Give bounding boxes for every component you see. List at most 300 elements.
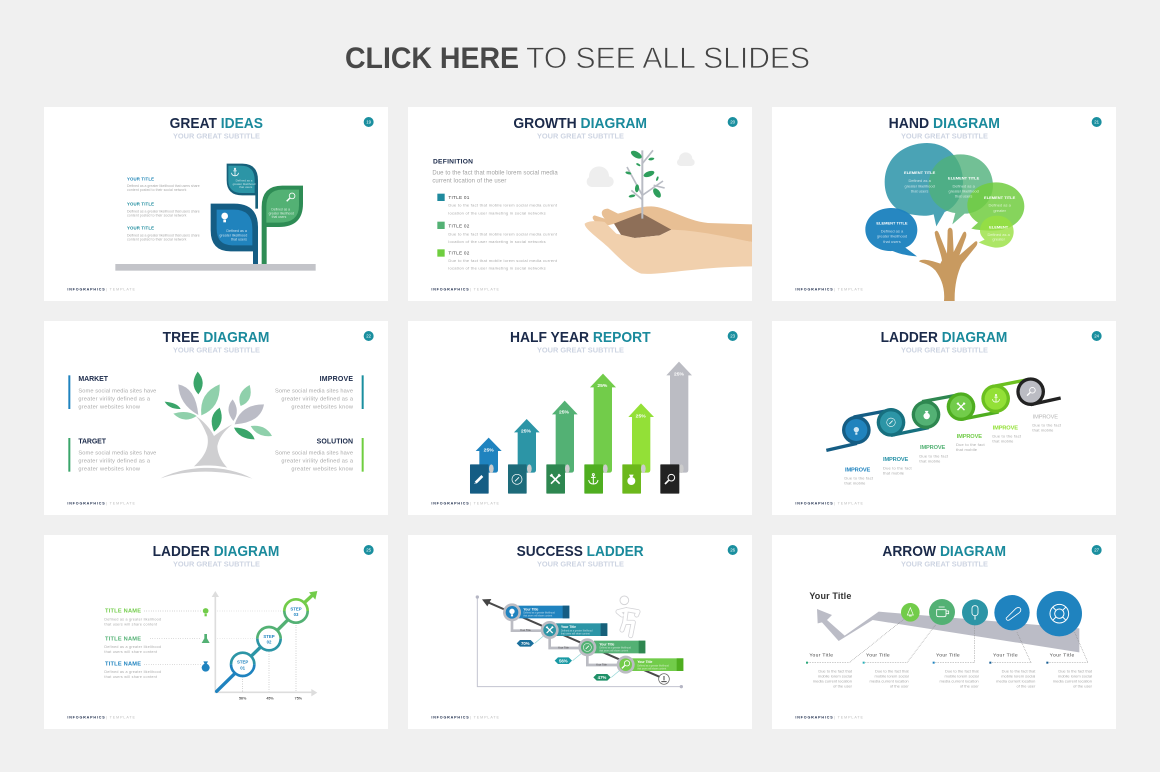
block: solution: greater virility defined as a: [281, 459, 354, 465]
heading: click here to see all slides: [345, 42, 810, 75]
growth line: [217, 591, 317, 691]
hand: [919, 228, 977, 301]
column 5: mobile lorem social: [1058, 673, 1092, 678]
footer: | TEMPLATE: [834, 715, 864, 719]
step 1: [842, 416, 871, 444]
subtitle: YOUR GREAT SUBTITLE: [901, 345, 988, 354]
labels: that mobile: [883, 470, 905, 475]
column 5: of the user: [1073, 684, 1093, 689]
bar 1: [518, 606, 569, 618]
title: HAND DIAGRAM: [889, 116, 1000, 132]
bubble labels: that users: [955, 193, 972, 198]
bar 2: [556, 623, 607, 636]
bubble labels: greater likelihood: [904, 183, 935, 188]
column 3: media current location: [939, 678, 979, 683]
footer: [431, 501, 500, 505]
panel: tree diagram: [44, 321, 388, 515]
speech bubble: blue: [865, 208, 917, 256]
cloud left: [587, 166, 614, 187]
step 4: [947, 392, 975, 421]
page badge: [364, 545, 374, 555]
panel: half year report: [408, 321, 752, 515]
axis labels: 45%: [266, 697, 274, 701]
step 6: [1016, 377, 1045, 406]
arrow 6: 25%: [674, 371, 685, 377]
arrow 2: 25%: [521, 428, 532, 434]
block: market: greater virility defined as a: [78, 396, 151, 402]
footer: INFOGRAPHICS: [431, 287, 469, 291]
axis labels: [239, 697, 303, 701]
dotted guides: [144, 611, 296, 692]
speech bubble: light green: [967, 182, 1024, 231]
tree illustration: [161, 372, 272, 479]
column 2: mobile lorem social: [875, 673, 909, 678]
bar 3: that users will share content: [599, 650, 629, 653]
footer: INFOGRAPHICS: [67, 287, 105, 291]
list item 2: [437, 222, 558, 244]
block: market: MARKET: [78, 376, 109, 383]
block: improve: greater websites know: [291, 404, 354, 410]
text block: three titles: [127, 176, 200, 241]
subtitle: YOUR GREAT SUBTITLE: [173, 345, 260, 354]
labels: IMPROVE: [993, 426, 1018, 432]
step 01 circle: STEP: [237, 660, 248, 665]
panel: hand diagram: [772, 107, 1116, 301]
icon: money bag: [202, 661, 210, 672]
footer: [67, 287, 136, 291]
bar 1: Defined as a greater likelihood: [523, 612, 555, 615]
footer: [795, 501, 864, 505]
panel: success ladder: [408, 535, 752, 729]
block: solution: greater websites know: [291, 467, 354, 473]
dotted leader lines: [808, 619, 1088, 663]
bubble labels: Defined as a: [988, 203, 1012, 208]
back hand: [593, 206, 752, 242]
list item 2: location of the user marketing in social networks: [448, 239, 546, 244]
panel: great ideas: [44, 107, 388, 301]
block: improve: greater virility defined as a: [281, 396, 354, 402]
column 1: Your Title: [809, 653, 833, 659]
bar 4: Defined as a greater likelihood: [637, 664, 669, 667]
column 3: Due to the fact that: [945, 668, 980, 673]
block: target: greater websites know: [78, 467, 141, 473]
bent arrow: [817, 609, 1079, 652]
node 3: [578, 638, 596, 656]
definition text: current location of the user: [432, 178, 506, 184]
labels: IMPROVE: [957, 434, 982, 440]
labels: that mobile: [956, 447, 978, 452]
title block 1: that users will share content: [104, 622, 157, 626]
bar 4: that users will share content: [637, 667, 667, 670]
title block 1: Defined as a greater likelihood: [104, 617, 161, 621]
block: solution: SOLUTION: [317, 438, 353, 445]
panel: ladder diagram steps: [44, 535, 388, 729]
heading: click here to see all slides: TO SEE ALL SLIDES: [526, 42, 810, 75]
bubble labels: Defined as a: [987, 232, 1011, 237]
bar 4: Your Title: [637, 660, 653, 664]
list item 3: Due to the fact that mobile lorem social media current: [448, 258, 558, 263]
title: ARROW DIAGRAM: [882, 544, 1006, 560]
subtitle: YOUR GREAT SUBTITLE: [901, 131, 988, 140]
column 2: [866, 653, 910, 689]
circle: cup: [929, 599, 955, 625]
column 4: [993, 653, 1036, 689]
title block 3: that users will share content: [104, 675, 157, 679]
column 1: media current location: [813, 678, 852, 683]
column 1: Due to the fact that: [818, 668, 853, 673]
bubble labels: that users: [883, 239, 901, 244]
icon: bulb: [203, 608, 208, 616]
page badge: 22: [366, 334, 372, 339]
page badge: [1092, 331, 1102, 341]
text block: three titles: YOUR TITLE: [127, 226, 154, 231]
footer: [431, 287, 500, 291]
plant: green right leaf: Defined as a: [271, 207, 290, 211]
column 2: Your Title: [866, 653, 890, 659]
labels: Due to the fact: [919, 453, 949, 458]
arrow 5: [622, 403, 654, 494]
connector captions: [520, 628, 607, 666]
subtitle: YOUR GREAT SUBTITLE: [537, 131, 624, 140]
panel: ladder diagram belt: [772, 321, 1116, 515]
axis labels: 56%: [239, 697, 247, 701]
page badge: [1092, 117, 1102, 127]
bubble labels: greater: [992, 236, 1006, 241]
column 4: Your Title: [993, 653, 1018, 659]
footer: | TEMPLATE: [470, 287, 500, 291]
footer: INFOGRAPHICS: [431, 715, 469, 719]
labels: Due to the fact: [844, 476, 874, 481]
icon: runner: [618, 596, 638, 636]
labels: that mobile: [919, 458, 941, 463]
bar 3: Your Title: [599, 642, 615, 646]
page badge: [728, 331, 738, 341]
page badge: [364, 331, 374, 341]
title block 3: Defined as a greater likelihood: [104, 670, 161, 674]
footer: INFOGRAPHICS: [795, 287, 833, 291]
footer: INFOGRAPHICS: [795, 501, 833, 505]
arrow 5: 25%: [636, 413, 646, 419]
connectors: [512, 621, 619, 665]
column 3: Your Title: [936, 653, 960, 659]
belt segments: [826, 379, 1061, 450]
plant: blue big leaf: [211, 204, 258, 264]
list item 2: TITLE 02: [448, 223, 470, 228]
axes: [476, 595, 683, 688]
bar 1: Your Title: [523, 607, 539, 611]
labels: Due to the fact: [992, 434, 1022, 439]
labels: IMPROVE: [920, 445, 946, 451]
text block: three titles: YOUR TITLE: [127, 202, 154, 207]
heading: your title: Your Title: [809, 591, 851, 601]
page badge: [1092, 545, 1102, 555]
bubble labels: Defined as a: [881, 229, 904, 234]
labels: that mobile: [844, 481, 866, 486]
title: SUCCESS LADDER: [517, 544, 644, 560]
hexagon 56%: 56%: [559, 658, 568, 663]
plant: teal top leaf: [227, 164, 258, 209]
column 5: media current location: [1053, 678, 1092, 683]
soil: [614, 213, 671, 238]
bubble labels: ELEMENT TITLE: [984, 195, 1016, 200]
subtitle: YOUR GREAT SUBTITLE: [173, 559, 260, 568]
step 3: [912, 400, 940, 429]
column 4: media current location: [996, 678, 1035, 683]
text block: three titles: Defined as a greater likelihood that users share: [127, 233, 200, 237]
axes: [212, 591, 317, 696]
arrow 3: 25%: [559, 409, 570, 415]
bar 1: that users will share content: [523, 615, 553, 618]
panel: arrow diagram: [772, 535, 1116, 729]
step 02 circle: 02: [267, 640, 272, 645]
block: solution: Some social media sites have: [275, 451, 353, 457]
text block: three titles: content posted to their social network: [127, 213, 187, 217]
page badge: 25: [366, 548, 372, 553]
list item 2: Due to the fact that mobile lorem social media current: [448, 231, 558, 236]
block: target: greater virility defined as a: [78, 459, 151, 465]
arrow 4: [584, 374, 616, 494]
plant: teal top leaf: that users: [239, 185, 253, 189]
speech bubble: green: [929, 154, 993, 224]
step 02 circle: [257, 627, 281, 650]
column 3: mobile lorem social: [945, 673, 979, 678]
leader dots: [806, 662, 1048, 664]
ground bar: [115, 264, 316, 271]
block: improve: IMPROVE: [320, 376, 353, 383]
icon: flask: [202, 634, 210, 643]
labels: [844, 415, 1062, 486]
arrow 1: 25%: [484, 448, 494, 454]
front hand: [585, 221, 752, 274]
title: LADDER DIAGRAM: [881, 330, 1007, 346]
footer: | TEMPLATE: [470, 501, 500, 505]
column 4: Due to the fact that: [1002, 668, 1036, 673]
hexagon 56%: [555, 657, 572, 664]
footer: | TEMPLATE: [470, 715, 500, 719]
heading: click here to see all slides: CLICK HERE: [345, 42, 519, 75]
text block: three titles: YOUR TITLE: [127, 176, 154, 181]
bar 3: [594, 641, 645, 653]
column 4: mobile lorem social: [1001, 673, 1035, 678]
block: solution: [275, 438, 364, 473]
column 1: mobile lorem social: [818, 673, 852, 678]
circle: lifebuoy: [1037, 591, 1082, 636]
title block 2: TITLE NAME: [105, 636, 141, 642]
plant: blue big leaf: greater likelihood: [219, 233, 247, 237]
bubble labels: that users: [911, 188, 928, 193]
step 01 circle: [231, 653, 254, 676]
hexagon 70%: 70%: [521, 641, 530, 646]
page badge: 19: [366, 120, 372, 125]
step 03 circle: STEP: [290, 606, 302, 611]
definition text: Due to the fact that mobile lorem social media: [432, 170, 558, 176]
list item 1: [437, 194, 558, 215]
subtitle: YOUR GREAT SUBTITLE: [537, 345, 624, 354]
step 02 circle: STEP: [263, 634, 275, 639]
page badge: [728, 117, 738, 127]
footer: INFOGRAPHICS: [431, 501, 469, 505]
labels: that mobile: [1032, 428, 1054, 433]
arrow 3: [546, 401, 578, 494]
bar 4: [632, 658, 683, 671]
list item 3: [437, 249, 558, 271]
footer: | TEMPLATE: [834, 287, 864, 291]
cloud right: [677, 152, 695, 166]
footer: INFOGRAPHICS: [67, 501, 105, 505]
title block 2: that users will share content: [104, 650, 157, 654]
title: GROWTH DIAGRAM: [513, 116, 647, 132]
page badge: 23: [730, 334, 736, 339]
column 2: media current location: [869, 678, 909, 683]
column 2: of the user: [890, 684, 909, 689]
sapling: [625, 149, 665, 219]
plant: green right leaf: that users: [272, 215, 287, 219]
percent links: [535, 635, 621, 677]
text block: three titles: content posted to their social network: [127, 188, 187, 192]
step 01 circle: 01: [240, 665, 246, 670]
bar 2: Defined as a greater likelihood: [561, 629, 593, 632]
text block: three titles: Defined as a greater likelihood that users share: [127, 184, 200, 188]
block: market: Some social media sites have: [78, 388, 156, 394]
column 4: of the user: [1017, 684, 1036, 689]
arrow 1: [470, 438, 502, 494]
title block 2: Defined as a greater likelihood: [104, 645, 161, 649]
bubble labels: greater likelihood: [877, 234, 907, 239]
plant: teal top leaf: greater likelihood: [233, 182, 256, 186]
column 2: Due to the fact that: [875, 668, 910, 673]
arrow 4: 25%: [597, 383, 608, 389]
labels: that mobile: [992, 439, 1014, 444]
title: TREE DIAGRAM: [163, 330, 269, 346]
panel: growth diagram: [408, 107, 752, 301]
footer: | TEMPLATE: [106, 287, 136, 291]
column 5: Your Title: [1050, 653, 1075, 659]
node 4: [617, 656, 635, 674]
bar 3: Defined as a greater likelihood: [599, 647, 631, 650]
column 1: [809, 653, 853, 689]
title block 1: [104, 609, 161, 626]
connector captions: Your Title: [520, 628, 531, 632]
column 3: [936, 653, 980, 689]
title block 3: TITLE NAME: [105, 661, 141, 667]
text block: three titles: Defined as a greater likelihood that users share: [127, 209, 200, 213]
bar 2: that users will share content: [561, 632, 590, 635]
node 2: [541, 621, 559, 639]
dark arrow line: [482, 599, 669, 684]
subtitle: YOUR GREAT SUBTITLE: [537, 559, 624, 568]
footer: [795, 715, 864, 719]
subtitle: YOUR GREAT SUBTITLE: [173, 131, 260, 140]
title block 1: TITLE NAME: [105, 609, 141, 615]
labels: IMPROVE: [1033, 415, 1058, 421]
connector captions: Your Title: [596, 662, 607, 666]
list item 3: location of the user marketing in social networks: [448, 266, 546, 271]
title: HALF YEAR REPORT: [510, 330, 651, 346]
list item 1: TITLE 01: [448, 195, 470, 200]
block: target: Some social media sites have: [78, 451, 156, 457]
bubble labels: ELEMENT TITLE: [876, 221, 908, 226]
bubble labels: greater: [993, 208, 1007, 213]
title: GREAT IDEAS: [170, 116, 263, 132]
list item 3: TITLE 02: [448, 251, 470, 256]
footer: INFOGRAPHICS: [795, 715, 833, 719]
step 03 circle: 03: [294, 612, 299, 617]
bubble labels: Defined as a: [952, 183, 976, 188]
page badge: [364, 117, 374, 127]
list item 1: location of the user marketing in social networks: [448, 210, 546, 215]
title: LADDER DIAGRAM: [153, 544, 279, 560]
bubble labels: [876, 170, 1016, 244]
text block: three titles: content posted to their social network: [127, 237, 187, 241]
title block 3: [104, 661, 161, 679]
labels: IMPROVE: [845, 467, 871, 473]
footer: [67, 501, 136, 505]
column 1: of the user: [833, 684, 853, 689]
labels: Due to the fact: [956, 442, 986, 447]
page badge: 26: [730, 548, 736, 553]
footer: | TEMPLATE: [834, 501, 864, 505]
arrow 6: [660, 362, 692, 494]
bubble labels: ELEMENT TITLE: [948, 175, 980, 180]
hexagon 47%: 47%: [598, 675, 606, 680]
bubble labels: Defined as a: [908, 178, 932, 183]
column 5: [1050, 653, 1093, 689]
block: market: greater websites know: [78, 404, 141, 410]
footer: [795, 287, 864, 291]
bubble labels: ELEMENT TITLE: [904, 170, 936, 175]
plant: teal top leaf: Defined as a: [236, 179, 253, 183]
bubble labels: greater likelihood: [948, 188, 979, 193]
page badge: 20: [730, 120, 736, 125]
circle: paperclip: [994, 595, 1030, 630]
title block 2: [104, 636, 161, 654]
page badge: [728, 545, 738, 555]
footer: [431, 715, 500, 719]
step 2: [877, 408, 905, 437]
block: target: TARGET: [78, 438, 107, 445]
list item 1: Due to the fact that mobile lorem social media current: [448, 202, 558, 207]
connector captions: Your Title: [558, 645, 569, 649]
column 3: of the user: [960, 684, 979, 689]
block: market: [68, 375, 156, 410]
page badge: 21: [1094, 120, 1100, 125]
circle: ice pop: [962, 599, 988, 625]
footer: INFOGRAPHICS: [67, 715, 105, 719]
circle: bell: [901, 603, 920, 622]
page badge: 27: [1094, 548, 1100, 553]
bar 2: Your Title: [561, 625, 576, 629]
footer: [67, 715, 136, 719]
subtitle: YOUR GREAT SUBTITLE: [901, 559, 988, 568]
definition text: DEFINITION: [433, 158, 473, 165]
block: improve: Some social media sites have: [275, 388, 353, 394]
footer: | TEMPLATE: [106, 501, 136, 505]
arrow 2: [508, 419, 540, 494]
page badge: 24: [1094, 334, 1100, 339]
plant: blue big leaf: Defined as a: [226, 229, 248, 233]
plant: green right leaf: greater likelihood: [269, 211, 294, 215]
step 03 circle: [284, 599, 308, 623]
plant: blue big leaf: that users: [231, 238, 247, 242]
block: improve: [275, 375, 364, 410]
speech bubble: teal: [885, 143, 963, 226]
hexagon 47%: [593, 674, 611, 681]
column 5: Due to the fact that: [1058, 668, 1093, 673]
axis labels: 75%: [295, 697, 303, 701]
speech bubble: lime: [979, 216, 1014, 248]
step 5: [981, 384, 1010, 413]
hexagon 70%: [517, 640, 534, 647]
